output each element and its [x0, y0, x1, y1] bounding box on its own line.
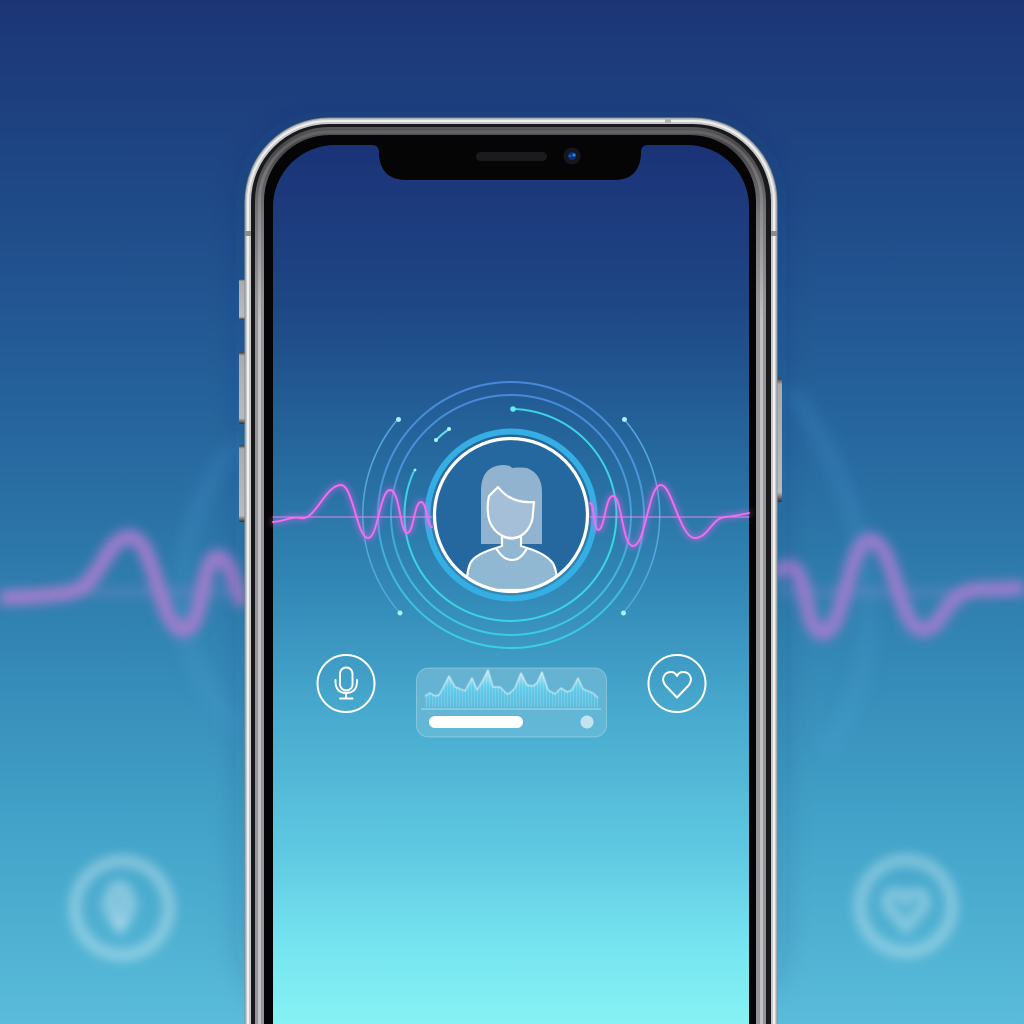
hair — [481, 465, 542, 544]
waveform crest — [425, 670, 598, 698]
blurred background rings right — [790, 390, 868, 750]
notch camera — [564, 148, 580, 164]
concentric rings — [378, 382, 644, 648]
waveform baseline — [421, 708, 601, 710]
blurred voice wave left — [0, 537, 244, 630]
face — [488, 487, 534, 538]
voice wave right — [590, 485, 749, 546]
waveform bars — [425, 670, 598, 707]
phone body — [244, 118, 778, 1024]
progress bar — [429, 716, 523, 728]
progress knob — [580, 716, 594, 728]
open arcs with node dots — [363, 406, 660, 621]
blurred microphone icon — [75, 861, 169, 955]
blurred heart icon — [860, 860, 952, 952]
collar — [496, 548, 527, 560]
voice wave left — [273, 485, 432, 538]
heart button — [648, 655, 706, 712]
shoulders — [466, 536, 558, 590]
audio panel — [416, 668, 606, 737]
microphone button — [318, 655, 374, 712]
notch speaker — [476, 152, 547, 161]
side buttons — [239, 279, 782, 522]
phone shadow — [230, 550, 792, 984]
avatar white ring — [434, 438, 588, 592]
blurred background rings left — [182, 440, 240, 730]
phone screen — [273, 145, 749, 1024]
avatar blue ring — [428, 432, 594, 598]
waveform — [425, 670, 598, 707]
avatar portrait — [436, 465, 586, 590]
blurred voice wave right — [770, 540, 1024, 633]
